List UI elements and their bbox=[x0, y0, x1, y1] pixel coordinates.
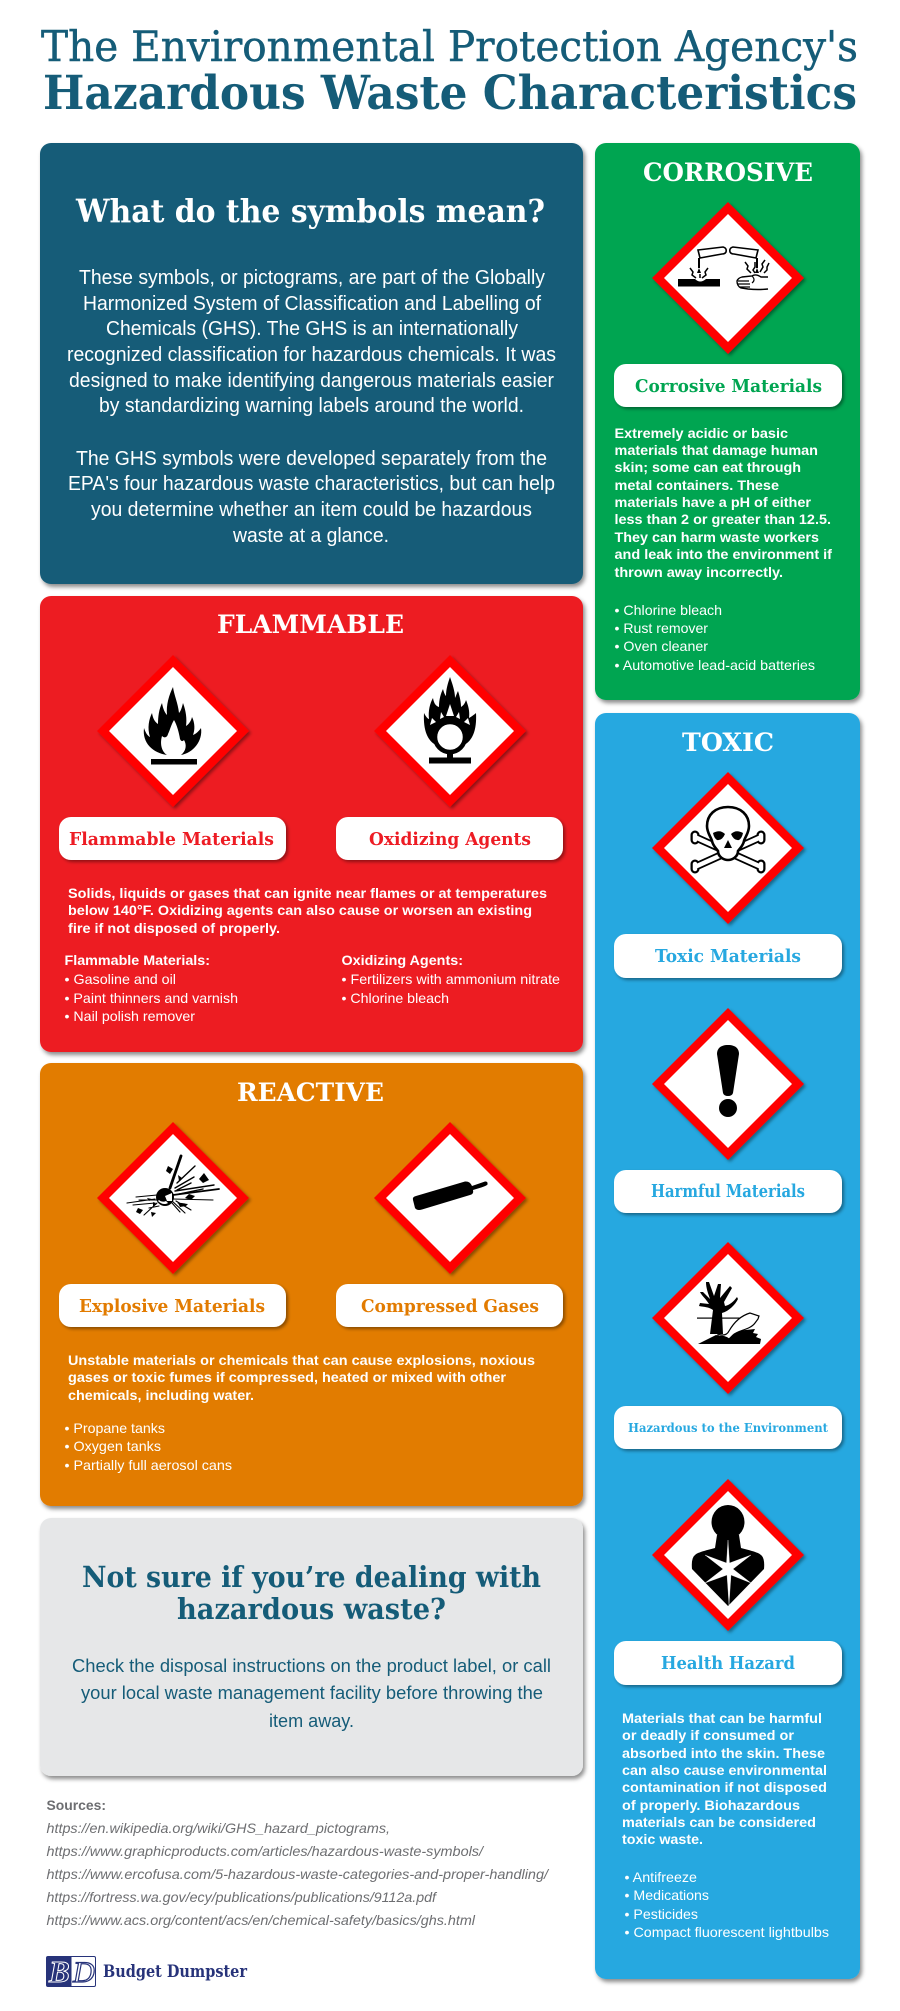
label: compressed gases: Compressed Gases bbox=[361, 1296, 539, 1317]
text block: flammable description bbox=[68, 885, 547, 936]
text block: disposal advice: item away. bbox=[269, 1710, 354, 1731]
list: reactive examples: • Partially full aerosol cans bbox=[64, 1457, 232, 1473]
text block: intro: EPA's four hazardous waste characteristics, but can help bbox=[68, 473, 555, 495]
list: corrosive examples bbox=[614, 602, 815, 673]
panel: toxic bbox=[595, 713, 860, 1979]
label: health hazard bbox=[614, 1641, 842, 1685]
list: flammable materials: • Paint thinners and varnish bbox=[64, 990, 238, 1006]
label: toxic materials bbox=[614, 934, 842, 978]
heading: not sure bbox=[82, 1560, 541, 1626]
list: corrosive examples: • Automotive lead-acid batteries bbox=[614, 657, 815, 673]
list: toxic examples: • Antifreeze bbox=[624, 1869, 697, 1885]
list: toxic examples: • Medications bbox=[624, 1887, 709, 1903]
text block: disposal advice: your local waste management facility before throwing the bbox=[81, 1682, 543, 1703]
text block: toxic description bbox=[622, 1710, 827, 1847]
panel: not sure callout bbox=[40, 1518, 583, 1776]
icon: skull and crossbones pictogram bbox=[652, 772, 804, 924]
heading: not sure: hazardous waste? bbox=[177, 1592, 446, 1626]
text block: toxic description: toxic waste. bbox=[622, 1831, 703, 1847]
icon: environment pictogram bbox=[652, 1242, 804, 1394]
text block: disposal advice: Check the disposal instructions on the product label, or call bbox=[72, 1655, 551, 1676]
icon: flame pictogram bbox=[97, 655, 249, 807]
list: flammable materials: • Nail polish remover bbox=[64, 1008, 195, 1024]
logo: Budget Dumpster: B bbox=[48, 1954, 70, 1989]
text block: toxic description: of properly. Biohazardous bbox=[622, 1797, 800, 1813]
text block: intro: These symbols, or pictograms, are part of the Globally bbox=[79, 267, 545, 289]
text block: corrosive description: thrown away incorrectly. bbox=[614, 564, 783, 580]
label: flammable materials bbox=[59, 817, 286, 860]
label: oxidizing agents: Oxidizing Agents bbox=[369, 829, 531, 850]
text block: intro: by standardizing warning labels around the world. bbox=[99, 395, 524, 417]
panel: corrosive bbox=[595, 143, 860, 700]
heading: reactive: REACTIVE bbox=[237, 1078, 384, 1107]
list: corrosive examples: • Rust remover bbox=[614, 620, 708, 636]
text block: intro: designed to make identifying dangerous materials easier bbox=[69, 370, 554, 392]
icon: health hazard pictogram bbox=[652, 1479, 804, 1631]
text block: toxic description: contamination if not disposed bbox=[622, 1779, 827, 1795]
text block: disposal advice bbox=[72, 1655, 551, 1731]
heading: not sure: Not sure if you’re dealing with bbox=[82, 1560, 541, 1594]
icon: flame over circle pictogram bbox=[374, 655, 526, 807]
list: oxidizing agents: • Chlorine bleach bbox=[342, 990, 449, 1006]
icon: exclamation mark pictogram bbox=[652, 1008, 804, 1160]
text block: toxic description: can also cause environmental bbox=[622, 1762, 827, 1778]
text block: reactive description bbox=[68, 1352, 535, 1403]
text block: corrosive description bbox=[614, 425, 832, 580]
label: corrosive materials: Corrosive Materials bbox=[635, 376, 822, 397]
text block: toxic description: absorbed into the skin. These bbox=[622, 1745, 825, 1761]
label: oxidizing agents bbox=[336, 817, 563, 860]
sources: Sources: bbox=[46, 1797, 106, 1813]
sources bbox=[46, 1797, 550, 1928]
list: reactive examples: • Oxygen tanks bbox=[64, 1438, 161, 1454]
text block: corrosive description: Extremely acidic or basic bbox=[614, 425, 788, 441]
text block: flammable description: fire if not disposed of properly. bbox=[68, 920, 280, 936]
logo: Budget Dumpster: D bbox=[72, 1956, 95, 1989]
text block: flammable description: below 140°F. Oxidizing agents can also cause or worsen an existing bbox=[68, 902, 532, 918]
label: harmful materials: Harmful Materials bbox=[651, 1181, 805, 1202]
text block: intro bbox=[67, 267, 556, 547]
logo: Budget Dumpster: Budget Dumpster bbox=[103, 1962, 248, 1982]
heading: toxic: TOXIC bbox=[682, 728, 774, 757]
label: hazardous to the environment: Hazardous to the Environment bbox=[628, 1420, 828, 1435]
sources: https://www.ercofusa.com/5-hazardous-waste-categories-and-proper-handling/ bbox=[46, 1866, 550, 1882]
text block: reactive description: chemicals, including water. bbox=[68, 1387, 254, 1403]
sources: https://fortress.wa.gov/ecy/publications/publications/9112a.pdf bbox=[46, 1889, 438, 1905]
list: toxic examples: • Pesticides bbox=[624, 1906, 698, 1922]
list: oxidizing agents: • Fertilizers with ammonium nitrate bbox=[342, 971, 560, 987]
text block: corrosive description: less than 2 or greater than 12.5. bbox=[614, 511, 831, 527]
text block: corrosive description: They can harm waste workers bbox=[614, 529, 819, 545]
text block: intro: Chemicals (GHS). The GHS is an internationally bbox=[106, 318, 518, 340]
panel: reactive bbox=[40, 1063, 583, 1506]
label: toxic materials: Toxic Materials bbox=[655, 946, 801, 967]
panel: flammable bbox=[40, 596, 583, 1052]
title bbox=[41, 22, 858, 121]
text block: corrosive description: metal containers. These bbox=[614, 477, 779, 493]
list: flammable materials: Flammable Materials: bbox=[64, 952, 210, 968]
text block: reactive description: Unstable materials or chemicals that can cause explosions, noxious bbox=[68, 1352, 535, 1368]
heading: corrosive: CORROSIVE bbox=[643, 158, 813, 187]
title: Hazardous Waste Characteristics bbox=[43, 66, 857, 121]
text block: intro: waste at a glance. bbox=[232, 525, 389, 547]
label: health hazard: Health Hazard bbox=[661, 1653, 795, 1674]
text block: intro: Harmonized System of Classification and Labelling of bbox=[83, 293, 541, 315]
icon: exploding bomb pictogram bbox=[97, 1122, 249, 1274]
sources: https://en.wikipedia.org/wiki/GHS_hazard_pictograms, bbox=[46, 1820, 390, 1836]
text block: corrosive description: skin; some can eat through bbox=[614, 459, 801, 475]
text block: corrosive description: and leak into the environment if bbox=[614, 546, 832, 562]
text block: intro: The GHS symbols were developed separately from the bbox=[76, 448, 547, 470]
sources: https://www.acs.org/content/acs/en/chemical-safety/basics/ghs.html bbox=[46, 1912, 476, 1928]
label: explosive materials bbox=[59, 1284, 286, 1327]
logo: Budget Dumpster bbox=[46, 1954, 248, 1989]
panel: what do the symbols mean bbox=[40, 143, 583, 584]
label: flammable materials: Flammable Materials bbox=[69, 829, 274, 850]
list: oxidizing agents bbox=[342, 952, 560, 1006]
sources: https://www.graphicproducts.com/articles/hazardous-waste-symbols/ bbox=[46, 1843, 485, 1859]
text block: corrosive description: materials have a pH of either bbox=[614, 494, 812, 510]
list: flammable materials: • Gasoline and oil bbox=[64, 971, 176, 987]
heading: flammable: FLAMMABLE bbox=[217, 610, 404, 639]
list: reactive examples bbox=[64, 1420, 232, 1473]
heading: what do the symbols mean: What do the symbols mean? bbox=[75, 192, 545, 230]
list: flammable materials bbox=[64, 952, 238, 1024]
list: oxidizing agents: Oxidizing Agents: bbox=[342, 952, 463, 968]
text block: toxic description: Materials that can be harmful bbox=[622, 1710, 822, 1726]
label: harmful materials bbox=[614, 1170, 842, 1213]
label: explosive materials: Explosive Materials bbox=[79, 1296, 265, 1317]
text block: toxic description: materials can be considered bbox=[622, 1814, 816, 1830]
text block: flammable description: Solids, liquids or gases that can ignite near flames or at temperatures bbox=[68, 885, 547, 901]
label: hazardous to the environment bbox=[614, 1406, 842, 1449]
list: toxic examples bbox=[624, 1869, 829, 1940]
text block: toxic description: or deadly if consumed or bbox=[622, 1727, 795, 1743]
list: reactive examples: • Propane tanks bbox=[64, 1420, 165, 1436]
text block: reactive description: gases or toxic fumes if compressed, heated or mixed with other bbox=[68, 1369, 507, 1385]
label: corrosive materials bbox=[614, 364, 842, 407]
list: toxic examples: • Compact fluorescent lightbulbs bbox=[624, 1924, 829, 1940]
text block: intro: you determine whether an item could be hazardous bbox=[91, 499, 532, 521]
text block: intro: recognized classification for hazardous chemicals. It was bbox=[67, 344, 556, 366]
text block: corrosive description: materials that damage human bbox=[614, 442, 818, 458]
title: The Environmental Protection Agency's bbox=[41, 22, 858, 71]
list: corrosive examples: • Chlorine bleach bbox=[614, 602, 722, 618]
label: compressed gases bbox=[336, 1284, 563, 1327]
icon: gas cylinder pictogram bbox=[374, 1122, 526, 1274]
icon: corrosion pictogram bbox=[652, 202, 804, 354]
list: corrosive examples: • Oven cleaner bbox=[614, 638, 708, 654]
